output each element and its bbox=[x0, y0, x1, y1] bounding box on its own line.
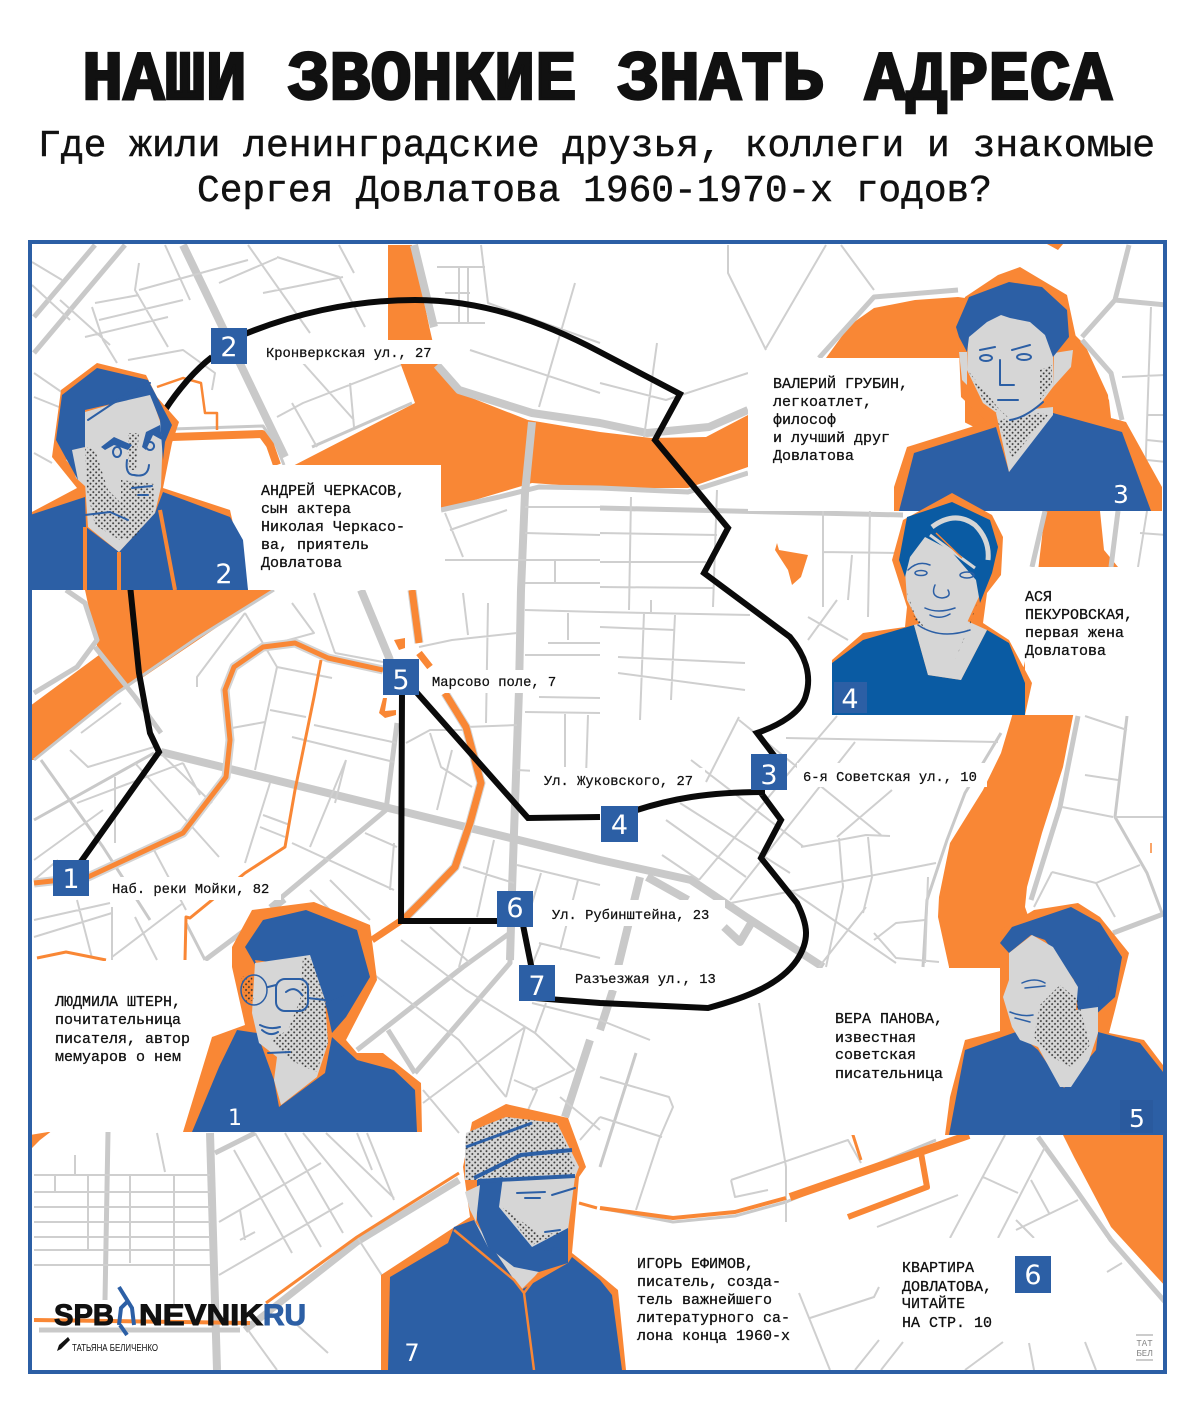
address label: Кронверкская: Кронверкская ул., 27 bbox=[266, 347, 432, 362]
logo: spbdnevnik: RU bbox=[263, 1299, 306, 1332]
text: Грубин: ВАЛЕРИЙ ГРУБИН, bbox=[773, 376, 908, 393]
marker 2 bbox=[211, 328, 247, 364]
map: major roads bbox=[34, 245, 1166, 1370]
marker 6: 6 bbox=[506, 893, 524, 924]
portrait 1: Штерн: 1 bbox=[228, 1106, 242, 1131]
portrait 7: Ефимов: 7 bbox=[404, 1339, 420, 1367]
text: Квартира Довлатова: ЧИТАЙТЕ bbox=[902, 1296, 965, 1313]
portrait 3: Грубин: 3 bbox=[1113, 480, 1129, 509]
subtitle: Сергея Довлатова 1960-1970-х годов? bbox=[197, 170, 992, 213]
text: Черкасов: АНДРЕЙ ЧЕРКАСОВ, bbox=[261, 483, 405, 500]
text: Черкасов: ва, приятель bbox=[261, 537, 369, 554]
marker 7: 7 bbox=[528, 971, 546, 1002]
marker 2: 2 bbox=[220, 332, 238, 363]
text: Пекуровская: Довлатова bbox=[1025, 643, 1106, 660]
map: canals bbox=[34, 378, 1151, 1323]
marker 6: квартира bbox=[1015, 1256, 1051, 1293]
logo: spbdnevnik: NEVNIK bbox=[139, 1299, 263, 1332]
text: Штерн: ЛЮДМИЛА ШТЕРН, bbox=[54, 994, 181, 1011]
map: water bbox=[30, 244, 1166, 1287]
map: white text panels bbox=[48, 340, 1163, 1239]
text: Квартира Довлатова: КВАРТИРА bbox=[902, 1260, 974, 1277]
text: Грубин: философ bbox=[773, 412, 836, 429]
signature mark: ТАТ bbox=[1136, 1339, 1153, 1349]
text: Штерн: писателя, автор bbox=[55, 1031, 190, 1048]
map: minor streets bbox=[32, 245, 1166, 1370]
address label: Рубинштейна: Ул. Рубинштейна, 23 bbox=[552, 907, 709, 924]
text: Пекуровская: первая жена bbox=[1025, 625, 1124, 642]
text: Ефимов: ИГОРЬ ЕФИМОВ, bbox=[637, 1256, 754, 1273]
text: Панова: ВЕРА ПАНОВА, bbox=[835, 1011, 943, 1028]
text: Квартира Довлатова: НА СТР. 10 bbox=[902, 1315, 992, 1332]
portrait 3: Грубин bbox=[894, 267, 1162, 511]
portrait 5: Панова bbox=[945, 903, 1169, 1135]
address label: Советская: 6-я Советская ул., 10 bbox=[803, 771, 977, 786]
marker 6: квартира: 6 bbox=[1024, 1260, 1042, 1291]
address label: Марсово поле: Марсово поле, 7 bbox=[432, 676, 556, 691]
text: Грубин: легкоатлет, bbox=[773, 394, 872, 411]
subtitle bbox=[38, 125, 1155, 213]
signature mark bbox=[1136, 1335, 1153, 1360]
icon: pen bbox=[57, 1337, 70, 1351]
portrait 7: Ефимов bbox=[381, 1104, 626, 1370]
text: Грубин: Довлатова bbox=[773, 448, 854, 465]
text: Грубин: и лучший друг bbox=[773, 430, 890, 447]
address label: Наб. реки Мойки: Наб. реки Мойки, 82 bbox=[112, 881, 269, 898]
text: Квартира Довлатова: ДОВЛАТОВА, bbox=[902, 1279, 992, 1296]
portrait 2: Черкасов: 2 bbox=[215, 559, 233, 590]
text: Панова: известная bbox=[835, 1030, 916, 1047]
map frame bbox=[30, 242, 1165, 1372]
marker 7 bbox=[519, 965, 555, 1002]
map: bottom right streets bbox=[799, 1263, 1122, 1370]
marker 6 bbox=[497, 891, 533, 927]
marker 1 bbox=[53, 860, 89, 896]
title: НАШИ ЗВОНКИЕ ЗНАТЬ АДРЕСА bbox=[82, 42, 1112, 121]
marker 5 bbox=[383, 659, 419, 696]
portrait 4: Пекуровская bbox=[832, 493, 1032, 715]
text: Ефимов: писатель, созда- bbox=[637, 1274, 781, 1291]
subtitle: Где жили ленинградские друзья, коллеги и знакомые bbox=[38, 125, 1155, 168]
text: Штерн: почитательница bbox=[55, 1012, 181, 1029]
text: Штерн: мемуаров о нем bbox=[55, 1049, 181, 1066]
portrait 4: Пекуровская: 4 bbox=[841, 684, 859, 715]
portrait 1: Штерн bbox=[183, 902, 422, 1132]
text: Черкасов: Николая Черкасо- bbox=[261, 519, 405, 536]
signature mark: БЕЛ bbox=[1136, 1349, 1153, 1359]
text: Ефимов: тель важнейшего bbox=[637, 1292, 772, 1309]
text: Панова: советская bbox=[835, 1047, 916, 1064]
marker 4: 4 bbox=[611, 810, 628, 841]
marker 3 bbox=[751, 754, 787, 791]
marker 4 bbox=[601, 806, 638, 842]
logo: spbdnevnik: SPB bbox=[54, 1299, 114, 1332]
text: Пекуровская: ПЕКУРОВСКАЯ, bbox=[1025, 607, 1133, 624]
text: Ефимов: лона конца 1960-х bbox=[637, 1328, 790, 1345]
map panel bbox=[30, 244, 1169, 1370]
map: canal casing bbox=[34, 590, 481, 918]
text: Черкасов: сын актера bbox=[261, 501, 351, 518]
marker 1: 1 bbox=[62, 864, 80, 895]
text: Ефимов: литературного са- bbox=[637, 1310, 790, 1327]
portrait 2: Черкасов bbox=[30, 363, 248, 590]
portrait 5: Панова: 5 bbox=[1129, 1104, 1145, 1133]
address label: Жуковского: Ул. Жуковского, 27 bbox=[544, 775, 693, 790]
marker 5: 5 bbox=[392, 665, 410, 696]
author credit: ТАТЬЯНА БЕЛИЧЕНКО bbox=[72, 1342, 158, 1354]
marker 3: 3 bbox=[760, 760, 778, 791]
text: Панова: писательница bbox=[835, 1066, 943, 1083]
logo: spbdnevnik bbox=[54, 1287, 306, 1335]
address: pin markers with labels bbox=[53, 328, 977, 1002]
route line bbox=[75, 300, 808, 1008]
address label: Разъезжая: Разъезжая ул., 13 bbox=[575, 973, 716, 988]
text: Пекуровская: АСЯ bbox=[1025, 589, 1052, 606]
text: Черкасов: Довлатова bbox=[261, 555, 342, 572]
